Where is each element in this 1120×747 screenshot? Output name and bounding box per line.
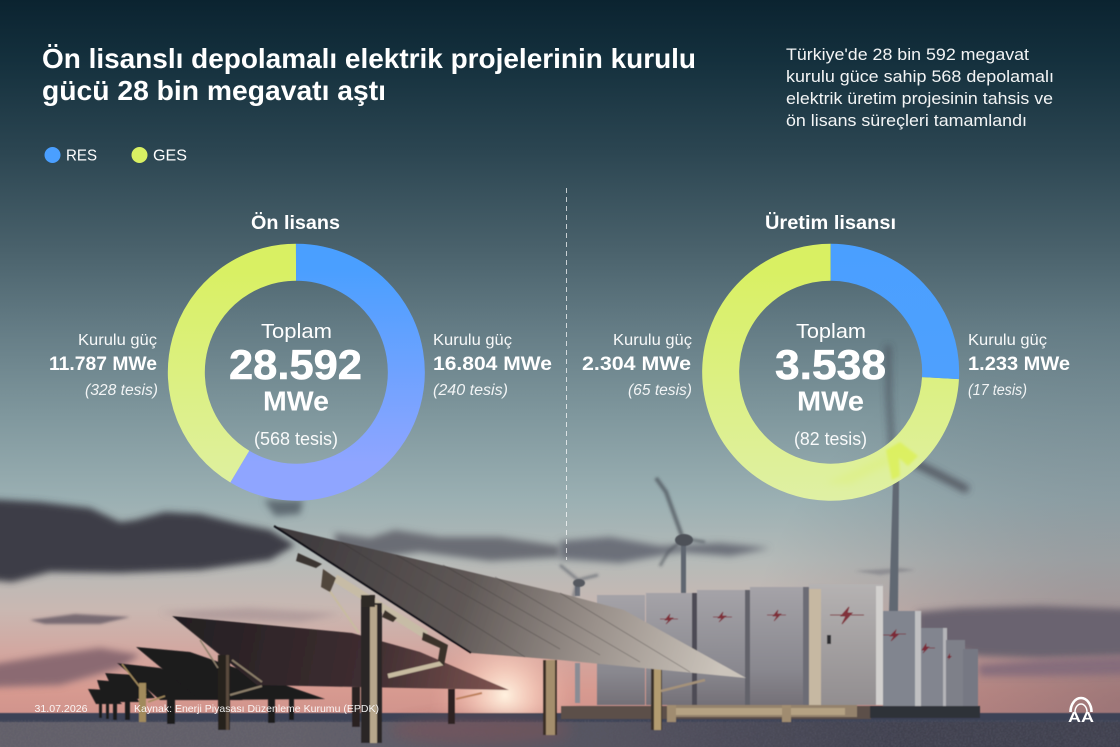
donut centre total: 28.592	[229, 341, 362, 388]
label: GES: 11.787 MWe	[49, 354, 157, 375]
label: GES: Kurulu güç	[78, 332, 157, 349]
title: Ön lisanslı depolamalı elektrik projelerinin kurulu	[42, 43, 696, 74]
intro text block: kurulu güce sahip 568 depolamalı	[786, 68, 1054, 86]
donut centre total: 3.538	[775, 341, 886, 388]
large turbine	[830, 345, 968, 612]
label: GES: (328 tesis)	[85, 382, 158, 399]
clouds	[0, 498, 1120, 688]
intro text block	[786, 46, 1054, 130]
horizon and ground	[0, 713, 1120, 723]
icon: AA logo	[1068, 698, 1094, 726]
sun glow	[430, 620, 580, 720]
distant solar panels	[88, 647, 325, 724]
intro text block: elektrik üretim projesinin tahsis ve	[786, 90, 1053, 108]
footer: source: Kaynak: Enerji Piyasası Düzenleme Kurumu (EPDK)	[134, 703, 379, 715]
middle solar panel	[172, 616, 509, 730]
title: gücü 28 bin megavatı aştı	[42, 75, 386, 106]
legend item: GES	[132, 147, 187, 164]
intro text block: Türkiye'de 28 bin 592 megavat	[786, 46, 1029, 64]
donut centre total: Toplam	[261, 320, 332, 343]
donut centre total	[775, 320, 886, 449]
label: GES	[582, 332, 692, 399]
label: RES: (240 tesis)	[433, 382, 508, 399]
label: RES	[433, 332, 552, 399]
label: RES: Kurulu güç	[433, 332, 512, 349]
donut centre total: MWe	[263, 386, 329, 416]
divider line	[566, 188, 568, 560]
legend item: RES	[44, 147, 97, 164]
label: RES	[968, 332, 1070, 399]
medium turbine	[656, 478, 705, 595]
donut centre total: Toplam	[796, 320, 866, 343]
donut chart: Ön lisans	[186, 262, 406, 482]
donut centre total: (82 tesis)	[794, 429, 867, 449]
label: GES: (65 tesis)	[628, 382, 692, 399]
label: GES	[49, 332, 158, 399]
label: RES: (17 tesis)	[968, 382, 1027, 399]
batteries	[597, 584, 978, 707]
donut centre total	[229, 320, 362, 449]
donut centre total: MWe	[797, 386, 864, 416]
footer: date: 31.07.2026	[34, 703, 88, 715]
front solar panel	[274, 526, 746, 743]
battery bolts	[660, 607, 952, 660]
icon: AA logo: AA	[1068, 709, 1094, 726]
legend item: RES: RES	[66, 148, 97, 164]
label: RES: 16.804 MWe	[433, 354, 552, 375]
panel: Ön lisans	[49, 213, 552, 482]
donut centre total: (568 tesis)	[254, 429, 338, 449]
panel: Üretim lisansı	[582, 213, 1070, 484]
label: GES: 2.304 MWe	[582, 354, 691, 375]
intro text block: ön lisans süreçleri tamamlandı	[786, 112, 1027, 130]
label: GES: Kurulu güç	[613, 332, 692, 349]
heading: Ön lisans: Ön lisans	[251, 213, 340, 234]
legend	[44, 147, 187, 164]
donut chart: Üretim lisansı	[721, 262, 941, 484]
label: RES: 1.233 MWe	[968, 354, 1070, 375]
battery platform	[561, 705, 980, 722]
small turbine	[560, 565, 598, 703]
legend item: GES: GES	[153, 148, 187, 164]
label: RES: Kurulu güç	[968, 332, 1047, 349]
heading: Üretim lisansı: Üretim lisansı	[765, 213, 896, 234]
title	[42, 43, 696, 106]
